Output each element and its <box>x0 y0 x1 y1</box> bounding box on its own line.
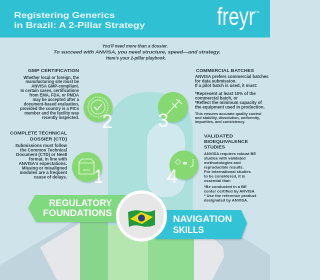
panel: GMP certification: Whether local or foreign, the <box>24 75 80 80</box>
title: in Brazil: A 2-Pillar Strategy <box>14 20 145 30</box>
panel: validated bioequivalence studies: to be considered, it is <box>204 174 246 178</box>
ribbon: navigation skills: NAVIGATION <box>173 214 232 224</box>
panel: complete technical dossier: COMPLETE TECHNICAL <box>10 130 67 136</box>
intro text: You'll need more than a dossier. <box>102 44 168 48</box>
panel: complete technical dossier: cause of delays. <box>34 174 67 180</box>
panel: GMP certification: In certain cases, certifications <box>21 88 80 93</box>
panel: validated bioequivalence studies: ANVISA requires robust BE <box>204 151 256 156</box>
panel: validated bioequivalence studies: reproducible results. <box>204 164 244 170</box>
title: Registering Generics <box>14 10 115 20</box>
background shapes <box>0 220 270 280</box>
panel: commercial batches: for data submission. <box>195 78 237 84</box>
panel: GMP certification: manufacturing site must be <box>26 79 80 84</box>
panel: GMP certification: GMP CERTIFICATION <box>28 68 79 73</box>
intro text: Here's your 2-pillar playbook. <box>106 56 166 60</box>
panel: complete technical dossier: Submissions must follow <box>15 143 68 148</box>
header band <box>0 0 270 38</box>
icon: step 3 batches <box>158 92 188 132</box>
title <box>14 10 145 30</box>
ribbon: navigation skills <box>155 210 247 239</box>
panel: validated bioequivalence studies: methodologies and <box>204 160 241 165</box>
icon: step 1 dossier folder: 1 <box>94 167 103 188</box>
ribbon: navigation skills: SKILLS <box>173 225 204 235</box>
panel: GMP certification: from EMA, FDA, or PMDA <box>29 92 79 98</box>
panel: commercial batches: and stability, dissolution, uniformity, <box>195 116 260 120</box>
panel: GMP certification: recently inspected. <box>42 115 79 120</box>
icon: step 2 certificate <box>84 93 113 133</box>
panel: GMP certification: may be accepted after a <box>33 97 80 102</box>
panel: GMP certification: document-based evaluation, <box>24 102 79 106</box>
panel: commercial batches <box>195 68 269 124</box>
panel: validated bioequivalence studies: *Be conducted in a BE <box>204 184 247 189</box>
panel: commercial batches: *Reflect the minimum capacity of <box>195 100 262 105</box>
panel: commercial batches: *Represent at least 10% of the <box>195 91 256 96</box>
icon: step 2 certificate: 2 <box>102 112 113 133</box>
panel: complete technical dossier: DOSSIER (CTD) <box>30 136 68 142</box>
panel: validated bioequivalence studies: essential that: <box>204 178 231 183</box>
intro text: To succeed with ANVISA, you need structure, speed—and strategy. <box>54 50 220 54</box>
panel: validated bioequivalence studies <box>204 134 257 202</box>
panel: commercial batches: impurities, and consistency. <box>195 120 245 124</box>
panel: commercial batches: commercial batch, or <box>195 96 238 100</box>
logo: TM <box>255 10 260 14</box>
panel: complete technical dossier: format, in line with <box>29 156 67 162</box>
logo: freyr <box>217 3 255 31</box>
icon: Brazil flag badge <box>118 192 166 240</box>
panel: complete technical dossier: Document (CTD) or Nee8 <box>16 152 68 157</box>
panel: commercial batches: This ensures accurate quality control <box>195 112 261 116</box>
panel: GMP certification: ANVISA GMP-compliant. <box>31 84 79 88</box>
ribbon: regulatory foundations: FOUNDATIONS <box>43 208 112 218</box>
panel: GMP certification: provided the country is a PICs <box>20 106 80 111</box>
panel: validated bioequivalence studies: designated by ANVISA. <box>204 198 248 202</box>
panel: validated bioequivalence studies: * Use the reference product <box>204 193 257 198</box>
panel: commercial batches: COMMERCIAL BATCHES <box>196 68 254 73</box>
arch background <box>108 92 193 225</box>
icon: step 4 studies <box>167 150 198 188</box>
ribbon: regulatory foundations: REGULATORY <box>49 198 112 208</box>
panel: commercial batches: ANVISA prefers commercial batches <box>195 74 269 79</box>
panel: validated bioequivalence studies: center certified by ANVISA <box>204 188 255 194</box>
icon: step 4 studies: 4 <box>167 167 178 188</box>
panel: complete technical dossier: the Common Technical <box>20 148 67 152</box>
panel: validated bioequivalence studies: BIOEQUIVALENCE <box>204 139 248 144</box>
intro text <box>54 44 220 60</box>
ribbon: regulatory foundations <box>28 195 128 222</box>
icon: step 3 batches: 3 <box>158 111 169 132</box>
panel: complete technical dossier: modules are a frequent <box>20 170 68 175</box>
panel: validated bioequivalence studies: VALIDATED <box>204 134 234 138</box>
panel: validated bioequivalence studies: For international studies <box>204 169 251 174</box>
panel: commercial batches: the equipment used in production. <box>195 104 265 110</box>
panel: validated bioequivalence studies: STUDIES <box>204 144 225 150</box>
panel: complete technical dossier: Missing or misaligned <box>22 166 67 170</box>
panel: GMP certification <box>20 68 80 120</box>
panel: GMP certification: member and the facility was <box>24 110 80 116</box>
icon: step 1 dossier folder <box>72 152 103 188</box>
panel: validated bioequivalence studies: studies with validated <box>204 156 246 160</box>
panel: commercial batches: If a pilot batch is used, it must: <box>195 83 257 88</box>
panel: complete technical dossier <box>10 130 68 180</box>
panel: complete technical dossier: ANVISA's expectations. <box>19 161 67 166</box>
